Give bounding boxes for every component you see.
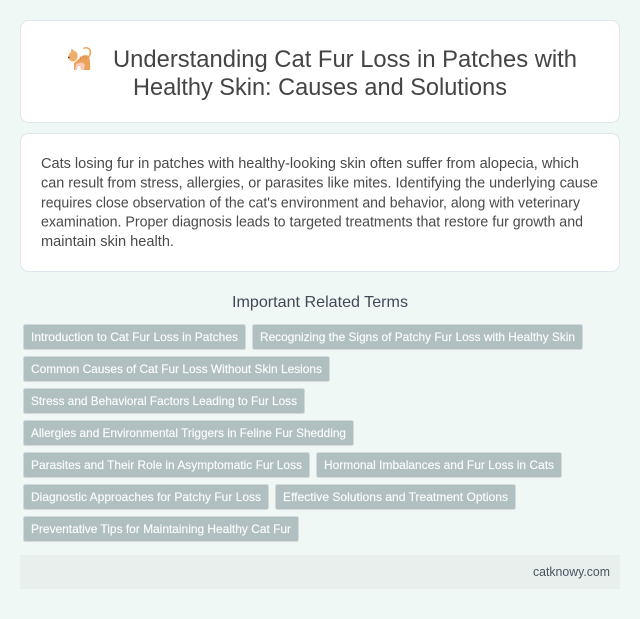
footer bar: catknowy.com xyxy=(533,564,610,579)
tag: Parasites and Their Role in Asymptomatic Fur Loss xyxy=(31,458,302,472)
tag: Hormonal Imbalances and Fur Loss in Cats xyxy=(324,458,554,472)
panel: summary text: can result from stress, allergies, or parasites like mites. Identifying the underlying cause xyxy=(41,176,598,192)
tag xyxy=(252,324,582,350)
tag xyxy=(24,452,310,478)
icon: cat xyxy=(68,48,90,70)
panel: summary text: Cats losing fur in patches with healthy-looking skin often suffer from alopecia, which xyxy=(41,156,579,172)
tag xyxy=(276,484,516,510)
title: Understanding Cat Fur Loss in Patches with xyxy=(113,46,577,73)
tag xyxy=(24,484,268,510)
tag: Stress and Behavioral Factors Leading to Fur Loss xyxy=(31,394,297,408)
footer bar xyxy=(20,555,620,589)
tag: Introduction to Cat Fur Loss in Patches xyxy=(31,330,238,344)
heading: important related terms: Important Related Terms xyxy=(232,294,408,311)
tag xyxy=(24,420,354,446)
panel: summary text: maintain skin health. xyxy=(41,234,174,250)
panel: title card xyxy=(20,20,620,122)
tag: Recognizing the Signs of Patchy Fur Loss with Healthy Skin xyxy=(260,330,575,344)
tag xyxy=(24,356,330,382)
tag: Diagnostic Approaches for Patchy Fur Loss xyxy=(31,490,261,504)
tag: Allergies and Environmental Triggers in Feline Fur Shedding xyxy=(31,426,346,440)
tag xyxy=(24,388,304,414)
tag xyxy=(24,324,246,350)
panel: related terms tags xyxy=(24,324,582,542)
panel: summary text: requires close observation of the cat's environment and behavior, along with veterinary xyxy=(41,196,581,212)
title xyxy=(113,46,577,101)
title: Healthy Skin: Causes and Solutions xyxy=(133,74,507,101)
tag xyxy=(316,452,562,478)
tag: Preventative Tips for Maintaining Healthy Cat Fur xyxy=(31,522,291,536)
tag xyxy=(24,516,298,542)
tag: Common Causes of Cat Fur Loss Without Skin Lesions xyxy=(31,362,322,376)
panel: summary text xyxy=(20,134,620,272)
panel: summary text: examination. Proper diagnosis leads to targeted treatments that restore fur growth and xyxy=(41,214,583,230)
tag: Effective Solutions and Treatment Options xyxy=(283,490,508,504)
